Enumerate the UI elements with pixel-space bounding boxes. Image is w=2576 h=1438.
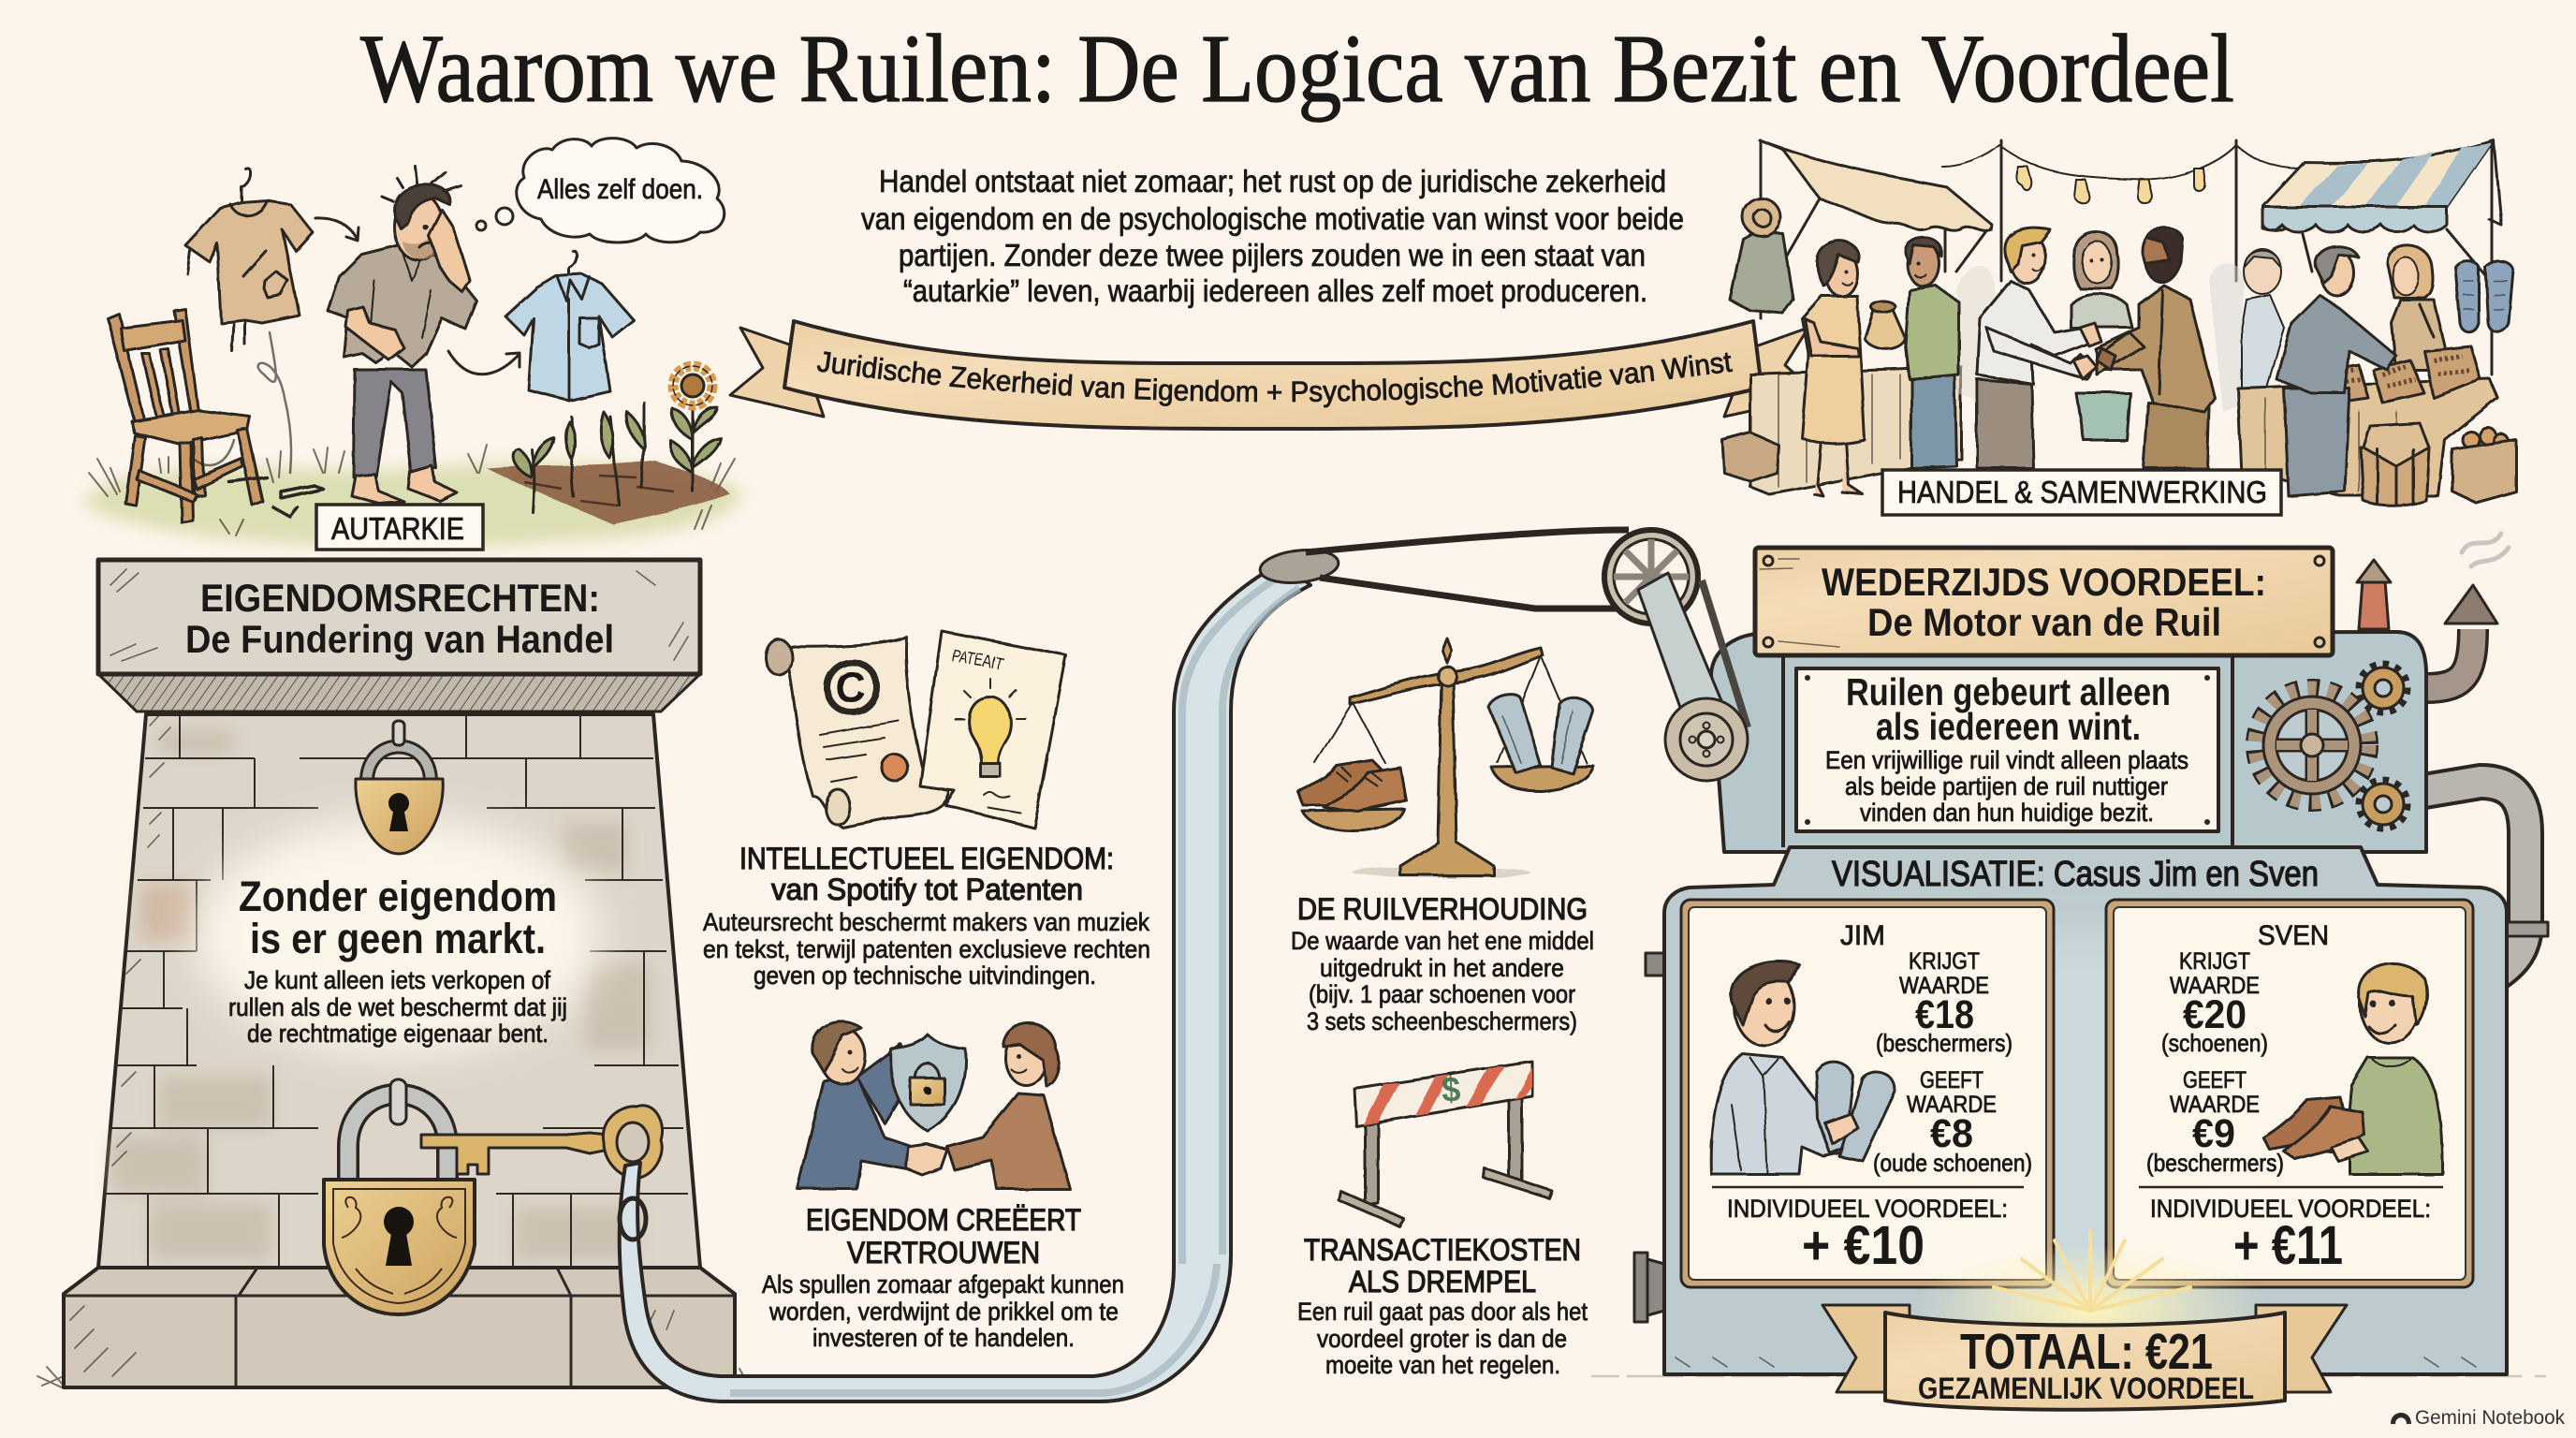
block: intellectueel eigendom: INTELLECTUEEL EIGENDOM: xyxy=(739,842,1114,875)
card: jim: + €10 xyxy=(1802,1215,1925,1276)
ribbon left tail xyxy=(730,328,824,417)
drive wheel xyxy=(1604,530,1748,781)
card: jim: €18 xyxy=(1915,992,1974,1037)
icon: patent paper: PATEAIT xyxy=(950,646,1004,675)
title: Waarom we Ruilen: De Logica van Bezit en Voordeel xyxy=(360,15,2234,123)
woman behind stall xyxy=(2387,245,2451,370)
icon: patent paper xyxy=(920,631,1066,828)
pillar shaft xyxy=(98,714,700,1268)
block: intellectueel eigendom xyxy=(703,842,1150,990)
pillar headline: is er geen markt. xyxy=(250,915,546,962)
grass tufts xyxy=(89,445,735,536)
hands xyxy=(906,1144,947,1175)
block: de ruilverhouding: 3 sets scheenbeschermers) xyxy=(1307,1007,1577,1035)
right awning xyxy=(2263,140,2501,232)
plaque: ruilen gebeurt alleen: Ruilen gebeurt alleen xyxy=(1846,670,2171,713)
icon: hanging jacket xyxy=(1730,198,1793,314)
man in suit xyxy=(798,1075,913,1189)
cloud text: Alles zelf doen. xyxy=(537,174,703,205)
conveyor belt xyxy=(620,530,1657,1401)
block: eigendom creeert vertrouwen: EIGENDOM CREËERT xyxy=(806,1203,1081,1237)
pillar: eigendomsrechten xyxy=(37,560,758,1387)
side knob xyxy=(1634,1253,1664,1322)
gears xyxy=(2256,666,2406,827)
shield xyxy=(890,1034,966,1131)
man in grey coat xyxy=(2276,246,2396,496)
jim gives: GEEFT xyxy=(1920,1067,1983,1093)
woman behind handshake xyxy=(2071,232,2132,440)
block: intellectueel eigendom: van Spotify tot Patenten xyxy=(771,873,1083,906)
block: eigendom creeert vertrouwen: worden, verdwijnt de prikkel om te xyxy=(768,1298,1119,1326)
pillar body text xyxy=(228,966,567,1048)
man in green sweater xyxy=(1905,238,1958,468)
card: sven xyxy=(2106,900,2473,1287)
card: jim: (oude schoenen) xyxy=(1873,1149,2032,1177)
icon: key xyxy=(421,1106,663,1178)
cap hatching xyxy=(110,569,688,661)
block: intellectueel eigendom: en tekst, terwijl patenten exclusieve rechten xyxy=(703,935,1150,963)
intro text: partijen. Zonder deze twee pijlers zouden we in een staat van xyxy=(899,238,1646,272)
shin guards xyxy=(1488,695,1541,773)
block: eigendom creeert vertrouwen xyxy=(762,1203,1124,1352)
stone hatching xyxy=(112,713,170,1166)
intro text: van eigendom en de psychologische motivatie van winst voor beide xyxy=(861,201,1684,236)
block: eigendom creeert vertrouwen: VERTROUWEN xyxy=(847,1236,1040,1269)
left awning xyxy=(1760,140,1992,231)
label: autarkie xyxy=(316,505,483,550)
sven result: INDIVIDUEEL VOORDEEL: xyxy=(2150,1195,2431,1223)
woman in jacket xyxy=(947,1093,1070,1189)
blond man xyxy=(1977,227,2093,468)
plaque: wederzijds voordeel xyxy=(1755,548,2333,655)
icon: handshake with shield xyxy=(798,1021,1070,1189)
pillar base xyxy=(64,1268,735,1387)
pillar cap underside xyxy=(98,674,700,712)
icon: barrel xyxy=(2361,423,2429,506)
ground wash xyxy=(84,462,742,547)
label: handel en samenwerking: HANDEL & SAMENWERKING xyxy=(1897,475,2267,509)
card: sven: + €11 xyxy=(2233,1215,2343,1276)
pillar cap xyxy=(98,560,700,674)
icon: barrier xyxy=(1339,1062,1552,1226)
block: eigendom creeert vertrouwen: investeren of te handelen. xyxy=(812,1324,1075,1352)
card: sven: (schoenen) xyxy=(2161,1029,2268,1057)
intro text: Handel ontstaat niet zomaar; het rust op de juridische zekerheid xyxy=(879,164,1666,198)
sven gives: GEEFT xyxy=(2183,1067,2247,1093)
cap heading: EIGENDOMSRECHTEN: xyxy=(200,576,600,620)
card: sven: (beschermers) xyxy=(2146,1149,2284,1177)
string lights xyxy=(1942,145,2301,204)
card: sven: SVEN xyxy=(2258,920,2329,951)
figure: sven xyxy=(2263,963,2442,1174)
card: jim: €8 xyxy=(1930,1111,1973,1156)
icon: tired man xyxy=(328,167,477,504)
plaque: ruilen gebeurt alleen: als beide partijen de ruil nuttiger xyxy=(1845,772,2168,800)
pillar body text: rullen als de wet beschermt dat jij xyxy=(228,993,567,1021)
card: jim: WAARDE xyxy=(1907,1092,1997,1118)
block: intellectueel eigendom: Auteursrecht beschermt makers van muziek xyxy=(703,908,1149,936)
card: sven: WAARDE xyxy=(2170,1092,2260,1118)
woman with jar xyxy=(1802,242,1865,496)
grass at base xyxy=(37,1367,758,1387)
block: transactiekosten xyxy=(1297,1233,1588,1379)
logo: gemini notebook: Gemini Notebook xyxy=(2415,1407,2565,1429)
block: transactiekosten: moeite van het regelen. xyxy=(1325,1351,1560,1379)
glow rays xyxy=(1912,1231,2268,1376)
back stall xyxy=(1750,367,1961,494)
icon: arrow to blue shirt xyxy=(448,351,520,374)
plaque: ruilen gebeurt alleen: als iedereen wint. xyxy=(1876,705,2141,748)
icon: box xyxy=(1722,433,1778,481)
red valve xyxy=(2359,580,2389,629)
soil patch xyxy=(487,461,730,524)
icon: small padlock xyxy=(356,721,443,854)
pillar body text: de rechtmatige eigenaar bent. xyxy=(247,1020,549,1048)
card: sven: WAARDE xyxy=(2170,973,2260,999)
block: de ruilverhouding: De waarde van het ene middel xyxy=(1291,927,1594,955)
drive belts xyxy=(1306,530,1657,609)
block: transactiekosten: voordeel groter is dan de xyxy=(1317,1325,1567,1353)
card: sven: €9 xyxy=(2192,1111,2235,1156)
right pan xyxy=(1492,766,1593,791)
stone patches xyxy=(112,730,651,1259)
icon: torn shirt xyxy=(185,168,313,351)
icon: chair xyxy=(108,309,323,522)
left pan xyxy=(1302,809,1404,831)
right pipe xyxy=(2424,782,2525,978)
block: de ruilverhouding: uitgedrukt in het andere xyxy=(1320,954,1564,982)
ribbon text: Juridische Zekerheid van Eigendom + Psychologische Motivatie van Winst xyxy=(816,351,1734,408)
ribbon body xyxy=(784,321,1762,429)
figure: jim xyxy=(1711,961,1895,1174)
jim result: INDIVIDUEEL VOORDEEL: xyxy=(1727,1195,2008,1223)
card: sven: €20 xyxy=(2183,992,2247,1037)
banner: totaal: TOTAAL: €21 xyxy=(1960,1324,2213,1380)
plaque: ruilen gebeurt alleen: vinden dan hun huidige bezit. xyxy=(1860,799,2154,827)
front stall xyxy=(2238,346,2497,496)
icon: balance scale xyxy=(1297,638,1593,878)
label: handel en samenwerking xyxy=(1882,470,2281,515)
icon: copyright scroll xyxy=(766,637,949,828)
card: jim: (beschermers) xyxy=(1876,1029,2012,1057)
pillar headline: Zonder eigendom xyxy=(239,873,557,920)
block: transactiekosten: ALS DREMPEL xyxy=(1349,1265,1536,1299)
icon: blue shirt xyxy=(505,251,634,401)
banner: totaal: GEZAMENLIJK VOORDEEL xyxy=(1918,1372,2254,1405)
chimney pipe xyxy=(2426,629,2473,688)
block: transactiekosten: TRANSACTIEKOSTEN xyxy=(1304,1233,1581,1267)
intro text xyxy=(861,164,1684,308)
upper body xyxy=(1711,632,2426,852)
smoke xyxy=(2462,534,2509,566)
jim gets: KRIJGT xyxy=(1909,948,1980,975)
loose thread xyxy=(192,332,291,473)
plaque: ruilen gebeurt alleen: Een vrijwillige ruil vindt alleen plaats xyxy=(1825,746,2188,774)
left awning posts xyxy=(1761,140,2492,374)
plaque: wederzijds voordeel: De Motor van de Ruil xyxy=(1867,600,2221,644)
block: de ruilverhouding: (bijv. 1 paar schoenen voor xyxy=(1309,980,1575,1008)
icon: jar xyxy=(1865,301,1906,349)
upper frame xyxy=(1783,655,2232,847)
label: autarkie: AUTARKIE xyxy=(331,511,464,546)
belt ring xyxy=(620,1198,646,1240)
plants xyxy=(514,403,721,513)
card: jim: WAARDE xyxy=(1899,973,1989,999)
icon: hanging boots xyxy=(2455,261,2513,332)
scene: autarkie xyxy=(84,139,742,550)
card: jim xyxy=(1681,900,2054,1287)
banner: totaal xyxy=(1822,1305,2347,1410)
bearded man xyxy=(2095,228,2215,468)
lower body xyxy=(1664,847,2507,1374)
block: de ruilverhouding xyxy=(1291,892,1594,1035)
stone joints xyxy=(105,714,688,1268)
ground shadow xyxy=(1591,1375,2546,1377)
ribbon right tail xyxy=(1724,328,1820,417)
block: de ruilverhouding: DE RUILVERHOUDING xyxy=(1297,892,1588,926)
text wash xyxy=(197,819,599,1053)
scene: market xyxy=(1722,140,2516,515)
handshake hands xyxy=(2073,323,2115,379)
heading: visualisatie: VISUALISATIE: Casus Jim en Sven xyxy=(1832,855,2319,894)
intro text: “autarkie” leven, waarbij iedereen alles zelf moet produceren. xyxy=(903,273,1647,308)
sven gets: KRIJGT xyxy=(2179,948,2250,975)
icon: crate xyxy=(2452,428,2516,503)
pillar body text: Je kunt alleen iets verkopen of xyxy=(244,966,550,994)
cap heading: De Fundering van Handel xyxy=(185,617,614,661)
ribbon banner xyxy=(728,319,1805,431)
plaque: ruilen gebeurt alleen xyxy=(1796,668,2218,831)
thought cloud xyxy=(476,139,724,242)
block: transactiekosten: Een ruil gaat pas door als het xyxy=(1297,1298,1588,1326)
belt shading xyxy=(730,573,1299,1393)
pillar headline xyxy=(239,873,557,962)
plaque: wederzijds voordeel: WEDERZIJDS VOORDEEL: xyxy=(1822,560,2266,604)
shoes xyxy=(1297,760,1383,805)
pulley top xyxy=(1258,547,1340,586)
card: jim: JIM xyxy=(1840,920,1885,951)
icon: sunflower xyxy=(673,366,712,405)
icon: copyright scroll: C xyxy=(835,663,866,712)
crank arm xyxy=(1638,573,1730,741)
icon: large padlock xyxy=(324,1079,475,1314)
icon: arrow to man xyxy=(315,218,359,241)
icon: barrier: $ xyxy=(1442,1070,1460,1108)
block: eigendom creeert vertrouwen: Als spullen zomaar afgepakt kunnen xyxy=(762,1270,1124,1299)
belt strip xyxy=(620,562,1310,1401)
cap heading xyxy=(185,576,614,661)
background figures xyxy=(1956,263,2247,412)
machine xyxy=(1591,530,2548,1410)
block: intellectueel eigendom: geven op technische uitvindingen. xyxy=(754,961,1096,990)
